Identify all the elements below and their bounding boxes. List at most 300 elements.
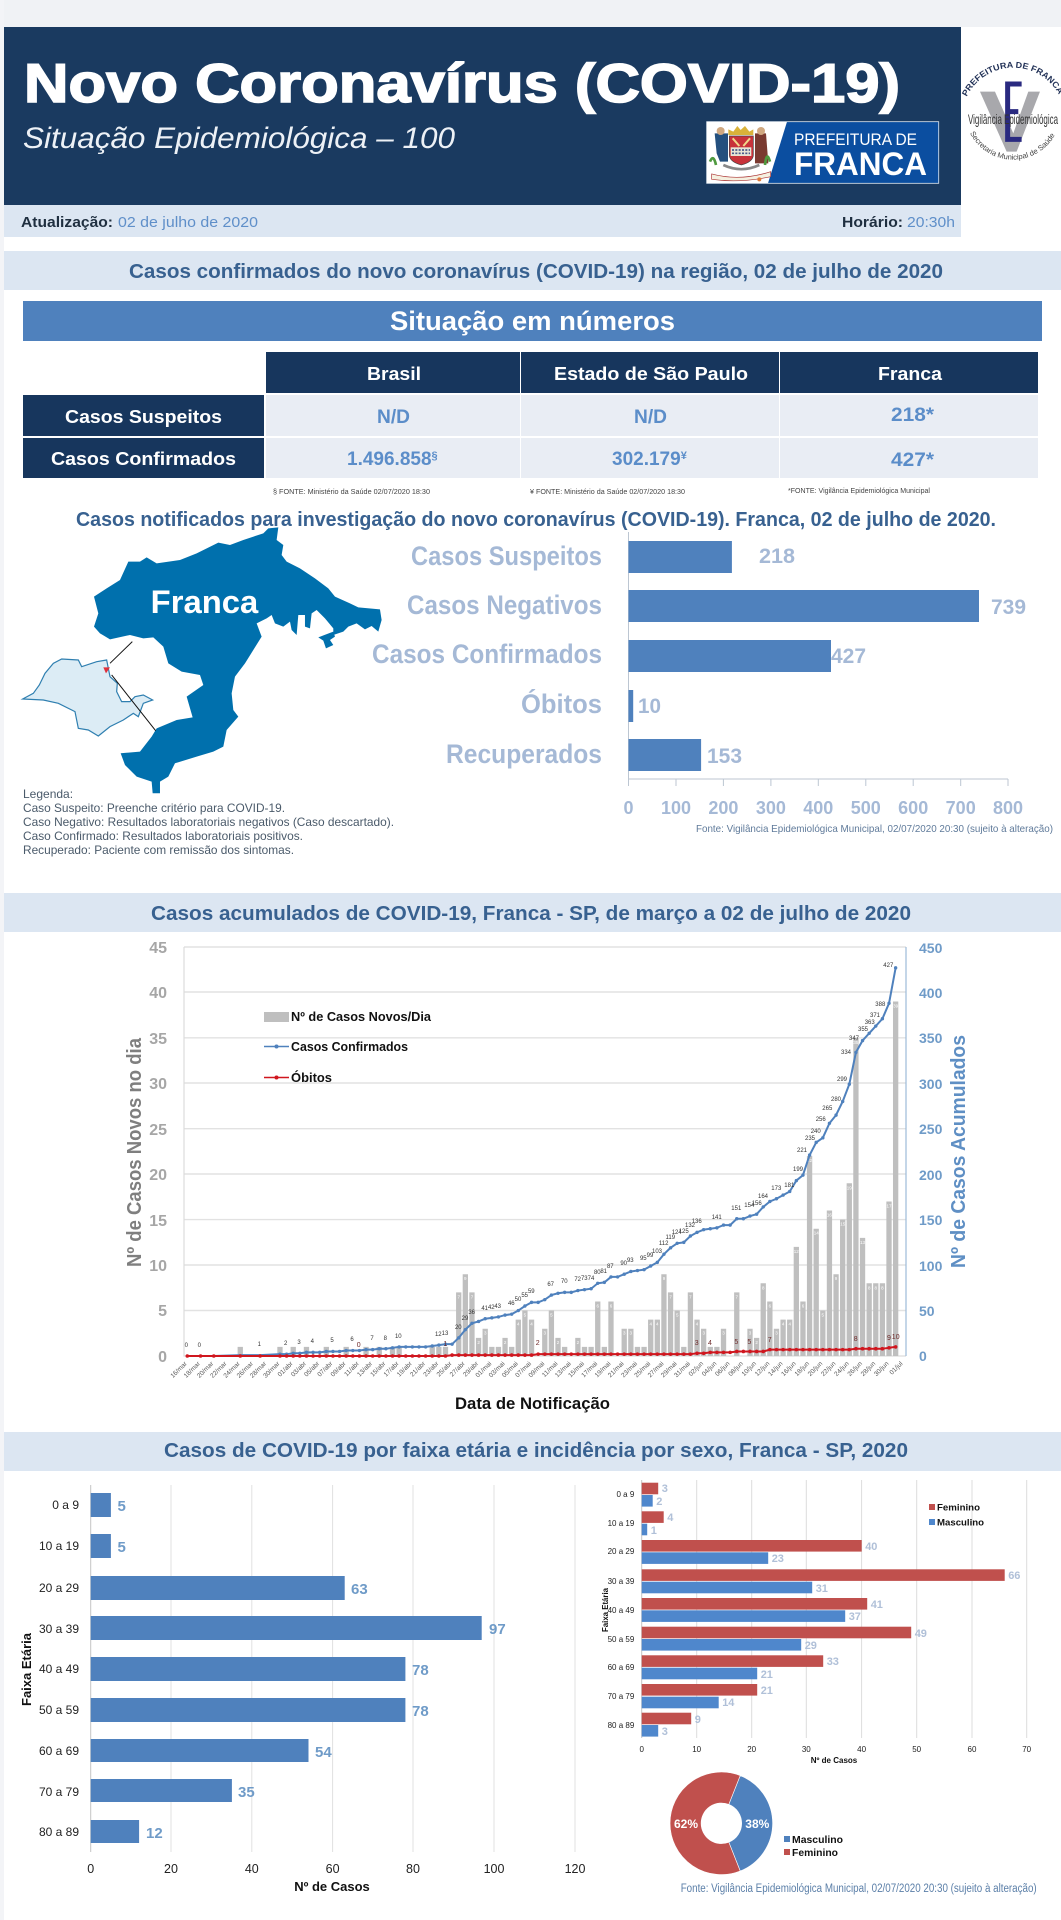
x axis dates: 01/abr xyxy=(277,1360,295,1378)
table: situação em números: ¥ xyxy=(681,450,688,462)
bar value labels: 3 xyxy=(623,1331,626,1336)
bar value labels: 5 xyxy=(524,1312,527,1318)
bar chart: casos por faixa etária: 70 a 79 xyxy=(39,1785,79,1799)
bar value labels: 8 xyxy=(881,1285,884,1290)
bar value labels: 22 xyxy=(807,1158,813,1163)
bar chart: casos por sexo e faixa etária xyxy=(601,1480,1032,1765)
bar chart: casos por sexo e faixa etária: 50 xyxy=(912,1745,922,1754)
bar chart: casos por sexo e faixa etária: 40 a 49 xyxy=(608,1606,635,1615)
x axis dates: 19/abr xyxy=(396,1360,414,1378)
x axis title: Data de Notificação xyxy=(455,1394,610,1413)
bar chart: casos por sexo e faixa etária: 2 xyxy=(656,1496,662,1508)
bar chart: casos por faixa etária: 54 xyxy=(315,1744,332,1761)
x axis dates: 30/jun xyxy=(873,1360,891,1378)
bar value labels: 3 xyxy=(722,1331,725,1336)
x axis dates: 03/mai xyxy=(488,1360,507,1379)
data labels: casos confirmados: 80 xyxy=(594,1270,601,1276)
x axis dates: 19/mai xyxy=(594,1360,612,1379)
table: situação em números: 1.496.858 xyxy=(347,449,432,470)
x axis dates: 14/jun xyxy=(767,1360,785,1378)
bar chart: casos por sexo e faixa etária: 10 xyxy=(692,1745,702,1754)
data labels: casos confirmados: 81 xyxy=(600,1269,608,1275)
data labels: casos confirmados: 12 xyxy=(435,1332,442,1338)
bar chart: casos notificados: 400 xyxy=(803,798,833,818)
bar chart: casos por faixa etária: 100 xyxy=(484,1862,504,1876)
chart legend xyxy=(264,1009,432,1085)
bar value labels: 7 xyxy=(689,1294,692,1299)
bar chart: casos por sexo e faixa etária: 33 xyxy=(827,1656,839,1668)
footnotes: *FONTE: Vigilância Epidemiológica Municipal xyxy=(788,488,930,495)
bar chart: casos notificados: 0 xyxy=(623,798,634,818)
donut chart: distribuição por sexo xyxy=(670,1772,843,1875)
data labels: casos confirmados: 1 xyxy=(258,1342,262,1348)
x axis dates: 08/jun xyxy=(727,1360,745,1378)
x axis dates: 26/mar xyxy=(236,1360,256,1380)
subtitle: Situação Epidemiológica – 100 xyxy=(23,122,455,155)
right axis title: Nº de Casos Acumulados xyxy=(948,1035,970,1268)
legend: sexo: Feminino xyxy=(937,1502,980,1514)
x axis dates: 09/mai xyxy=(527,1360,546,1379)
data labels: casos confirmados: 95 xyxy=(640,1256,647,1262)
data labels: casos confirmados: 6 xyxy=(350,1337,354,1343)
data labels: casos confirmados: 363 xyxy=(865,1020,875,1026)
x axis dates: 16/mar xyxy=(169,1360,189,1380)
map legend text: Recuperado: Paciente com remissão dos sintomas. xyxy=(23,843,294,857)
bar value labels: 6 xyxy=(596,1304,599,1308)
bar value labels: 7 xyxy=(457,1294,460,1299)
section heading: faixa etária e sexo xyxy=(4,1432,1061,1471)
bar value labels: 9 xyxy=(464,1276,467,1281)
legend: sexo xyxy=(929,1502,984,1528)
bar chart: casos notificados: Casos Suspeitos xyxy=(411,541,602,571)
data labels: casos confirmados: 280 xyxy=(831,1097,842,1103)
bar value labels: 5 xyxy=(822,1312,825,1318)
table: situação em números xyxy=(23,352,1038,496)
bar chart: casos por sexo e faixa etária: 23 xyxy=(772,1553,784,1565)
data labels: casos confirmados: 156 xyxy=(752,1201,762,1207)
left axis title: Nº de Casos Novos no dia xyxy=(124,1037,146,1267)
bar chart: casos por sexo e faixa etária: 3 xyxy=(662,1726,668,1738)
bar value labels: 19 xyxy=(847,1185,852,1190)
right axis numbers xyxy=(919,940,943,1364)
x axis dates: 17/abr xyxy=(383,1360,401,1378)
left axis numbers: 15 xyxy=(149,1213,167,1230)
data labels: casos confirmados: 74 xyxy=(588,1276,595,1282)
data labels: casos confirmados: 141 xyxy=(712,1215,722,1221)
right axis numbers: 250 xyxy=(919,1121,943,1137)
table: situação em números: N/D xyxy=(377,407,410,428)
logo: Vigilância Epidemiológica: Secretaria Municipal de Saúde xyxy=(970,132,1054,161)
data labels: casos confirmados: 240 xyxy=(811,1129,821,1135)
bar chart: casos por faixa etária xyxy=(19,1485,585,1894)
bar chart: casos por sexo e faixa etária: 60 xyxy=(968,1745,977,1754)
x axis dates: 26/jun xyxy=(846,1360,864,1378)
x axis dates: 27/abr xyxy=(449,1360,467,1378)
table: situação em números: 427* xyxy=(891,450,935,471)
table: situação em números: Estado de São Paulo xyxy=(554,364,748,384)
bar chart: casos notificados xyxy=(372,532,1053,835)
chart legend: Nº de Casos Novos/Dia xyxy=(291,1009,432,1024)
x axis dates: 27/mai xyxy=(647,1360,665,1379)
bar chart: casos por faixa etária: 120 xyxy=(565,1862,585,1876)
x axis dates: 10/jun xyxy=(741,1360,758,1378)
x axis dates: 22/mar xyxy=(209,1360,229,1380)
data labels: casos confirmados: 132 xyxy=(685,1223,696,1229)
bar chart: casos por sexo e faixa etária: 9 xyxy=(695,1714,701,1726)
data labels: casos confirmados: 0 xyxy=(198,1343,202,1349)
data labels: casos confirmados: 29 xyxy=(462,1316,469,1322)
x axis dates: 09/abr xyxy=(330,1360,348,1378)
bar value labels: 39 xyxy=(893,1004,899,1008)
bar value labels: 8 xyxy=(868,1285,871,1290)
bar value labels: 7 xyxy=(471,1294,474,1299)
bar chart: casos por faixa etária: 0 xyxy=(87,1862,94,1876)
bar chart: casos notificados: 10 xyxy=(638,695,661,718)
bar value labels: 9 xyxy=(663,1276,666,1281)
data labels: casos confirmados: 265 xyxy=(822,1106,833,1112)
bar value labels: 3 xyxy=(630,1331,633,1336)
donut legend: Feminino xyxy=(792,1847,838,1859)
title: Novo Coronavírus (COVID-19) xyxy=(24,52,900,114)
bar value labels: 8 xyxy=(875,1285,878,1290)
table: situação em números: Brasil xyxy=(367,364,421,384)
bar chart: casos por sexo e faixa etária: 41 xyxy=(871,1599,883,1611)
map legend text: Caso Negativo: Resultados laboratoriais negativos (Caso descartado). xyxy=(23,815,394,829)
right axis numbers: 300 xyxy=(919,1076,943,1092)
x axis dates: 15/abr xyxy=(369,1360,388,1378)
bar chart: casos notificados: 500 xyxy=(851,798,881,818)
left axis numbers: 35 xyxy=(149,1031,167,1048)
bar value labels: 2 xyxy=(504,1340,507,1345)
y axis title: Faixa Etária xyxy=(601,1587,610,1632)
bar chart: casos por faixa etária: 80 xyxy=(406,1862,420,1876)
data labels: casos confirmados: 67 xyxy=(547,1282,555,1288)
bar chart: casos notificados: 300 xyxy=(756,798,786,818)
chart legend: Casos Confirmados xyxy=(291,1039,408,1054)
update bar: 02 de julho de 2020 xyxy=(118,214,258,231)
donut chart: distribuição por sexo: 62% xyxy=(674,1817,698,1831)
data labels: casos confirmados: 8 xyxy=(384,1336,388,1342)
bar chart: casos notificados: Casos Confirmados xyxy=(372,639,602,669)
bar chart: casos por sexo e faixa etária: 30 a 39 xyxy=(608,1577,635,1586)
bar value labels: 35 xyxy=(853,1040,859,1045)
x axis dates xyxy=(169,1360,905,1380)
bar value labels: 4 xyxy=(649,1322,652,1327)
bar value labels: 14 xyxy=(814,1231,819,1236)
data labels: casos confirmados: 20 xyxy=(455,1325,462,1331)
bar chart: casos por faixa etária: 80 a 89 xyxy=(39,1825,79,1839)
data labels: óbitos: 1 xyxy=(443,1341,447,1348)
x axis dates: 28/jun xyxy=(860,1360,877,1378)
section heading: faixa etária e sexo: Casos de COVID-19 por faixa etária e incidência por sexo, Franca - SP, 2020 xyxy=(164,1440,908,1462)
bar value labels: 8 xyxy=(762,1285,765,1290)
data labels: casos confirmados: 70 xyxy=(561,1279,568,1285)
logo text: prefeitura de: PREFEITURA DE xyxy=(794,130,917,149)
data labels: casos confirmados: 427 xyxy=(883,963,894,969)
right axis numbers: 350 xyxy=(919,1030,943,1046)
bar chart: casos por faixa etária: 78 xyxy=(412,1703,429,1720)
bar chart: casos notificados: Recuperados xyxy=(446,739,602,769)
bar value labels: 15 xyxy=(840,1222,846,1227)
right axis numbers: 0 xyxy=(919,1348,927,1364)
x axis dates: 01/jul xyxy=(888,1360,905,1376)
bar chart: casos notificados: 153 xyxy=(707,745,742,768)
bar value labels: 4 xyxy=(782,1322,785,1327)
data labels: óbitos: 3 xyxy=(695,1340,699,1347)
data labels: casos confirmados: 7 xyxy=(370,1336,374,1342)
data labels: óbitos: 9 xyxy=(887,1335,891,1342)
data labels: casos confirmados: 55 xyxy=(521,1293,529,1299)
bar value labels: 5 xyxy=(550,1312,553,1318)
bar chart: casos por sexo e faixa etária: 31 xyxy=(816,1583,828,1595)
x axis dates: 11/abr xyxy=(343,1360,361,1378)
y axis title: Faixa Etária xyxy=(19,1632,34,1706)
map legend text: Legenda: xyxy=(23,787,73,801)
bar chart: casos notificados: 700 xyxy=(946,798,976,818)
bar value labels: 6 xyxy=(610,1304,613,1308)
left axis numbers: 45 xyxy=(149,940,167,957)
right axis numbers: 450 xyxy=(919,940,943,956)
x axis dates: 17/mai xyxy=(580,1360,599,1379)
bar chart: casos por faixa etária: 35 xyxy=(238,1784,255,1801)
update bar: Atualização: xyxy=(21,214,113,231)
bar value labels: 3 xyxy=(544,1331,547,1336)
data labels: casos confirmados: 0 xyxy=(185,1343,189,1349)
x axis dates: 11/mai xyxy=(541,1360,559,1379)
data labels: casos confirmados: 50 xyxy=(515,1297,522,1303)
bar value labels: 6 xyxy=(802,1304,805,1308)
x axis title: Nº de Casos xyxy=(294,1879,370,1894)
bar value labels: 12 xyxy=(794,1249,799,1254)
bar chart: casos por sexo e faixa etária: 0 a 9 xyxy=(617,1490,635,1499)
logo: Vigilância Epidemiológica xyxy=(962,62,1061,161)
bar value labels: 4 xyxy=(696,1322,699,1327)
x axis dates: 04/jun xyxy=(701,1360,719,1378)
update bar xyxy=(4,205,961,237)
bar chart: casos por faixa etária: 40 xyxy=(245,1862,259,1876)
donut chart: distribuição por sexo: 38% xyxy=(745,1817,770,1831)
bar value labels: 2 xyxy=(577,1340,580,1345)
map legend text xyxy=(23,787,394,857)
bars: novos casos por dia xyxy=(238,1001,898,1356)
data labels: casos confirmados: 99 xyxy=(647,1253,654,1259)
x axis dates: 25/abr xyxy=(436,1360,454,1378)
bar chart: casos por sexo e faixa etária: 70 a 79 xyxy=(608,1692,635,1701)
footnotes: § FONTE: Ministério da Saúde 02/07/2020 18:30 xyxy=(273,489,430,496)
bar value labels xyxy=(457,1004,899,1345)
banner: situação em números xyxy=(23,301,1042,341)
x axis dates: 18/jun xyxy=(794,1360,811,1378)
data labels: óbitos xyxy=(357,1334,900,1349)
update bar: 20:30h xyxy=(907,214,955,231)
data labels: casos confirmados: 388 xyxy=(875,1002,886,1008)
bar value labels: 4 xyxy=(656,1322,659,1327)
bar value labels: 3 xyxy=(702,1331,705,1336)
legend: sexo: Masculino xyxy=(937,1518,984,1528)
section heading: casos acumulados xyxy=(4,893,1061,932)
bar chart: casos por sexo e faixa etária: 29 xyxy=(805,1640,817,1652)
x axis dates: 24/jun xyxy=(833,1360,851,1378)
bar value labels: 2 xyxy=(755,1340,758,1345)
x axis dates: 21/abr xyxy=(409,1360,428,1378)
left axis numbers: 25 xyxy=(149,1122,167,1139)
table: situação em números: Casos Confirmados xyxy=(51,449,236,469)
logo text: franca: FRANCA xyxy=(794,146,927,182)
bar chart: casos por sexo e faixa etária: 49 xyxy=(915,1628,927,1640)
data labels: casos confirmados: 181 xyxy=(784,1183,795,1189)
bar chart: casos notificados: Casos Negativos xyxy=(407,590,602,620)
data labels: óbitos: 8 xyxy=(854,1336,858,1343)
bar chart: casos por sexo e faixa etária: 14 xyxy=(722,1697,735,1709)
left axis numbers: 5 xyxy=(158,1303,167,1320)
footnotes xyxy=(273,488,930,496)
data labels: óbitos: 4 xyxy=(708,1340,712,1347)
x axis dates: 07/abr xyxy=(316,1360,335,1378)
table: situação em números: N/D xyxy=(634,407,667,428)
bar chart: casos por faixa etária: 30 a 39 xyxy=(39,1622,79,1636)
x axis dates: 15/mai xyxy=(567,1360,586,1379)
data labels: casos confirmados: 3 xyxy=(297,1340,301,1346)
logo: Prefeitura de Franca xyxy=(707,122,939,183)
heading: casos notificados: Casos notificados para investigação do novo coronavírus (COVID-19). Franca, 02 de julho de 2020. xyxy=(76,509,996,531)
data labels: casos confirmados: 59 xyxy=(528,1289,535,1295)
line: óbitos xyxy=(187,1347,896,1356)
x axis dates: 07/mai xyxy=(514,1360,533,1379)
data labels: casos confirmados: 46 xyxy=(508,1301,515,1307)
x axis dates: 25/mai xyxy=(633,1360,652,1379)
x axis dates: 12/jun xyxy=(754,1360,772,1378)
bar chart: casos por sexo e faixa etária: 37 xyxy=(849,1611,861,1623)
data labels: casos confirmados: 90 xyxy=(620,1261,628,1267)
x axis dates: 05/mai xyxy=(501,1360,520,1379)
bar value labels: 7 xyxy=(669,1294,672,1299)
bar chart: casos por sexo e faixa etária: 20 xyxy=(747,1745,757,1754)
bar value labels: 3 xyxy=(484,1331,487,1336)
bar chart: casos por sexo e faixa etária: 60 a 69 xyxy=(608,1663,635,1672)
left axis numbers xyxy=(149,940,167,1366)
bar chart: casos por sexo e faixa etária: 50 a 59 xyxy=(608,1635,635,1644)
bar chart: casos por sexo e faixa etária: 4 xyxy=(667,1512,674,1524)
bar value labels: 4 xyxy=(517,1322,520,1327)
bar chart: casos por sexo e faixa etária: 66 xyxy=(1008,1570,1020,1582)
x axis dates: 28/mar xyxy=(249,1360,269,1380)
data labels: casos confirmados: 151 xyxy=(731,1206,742,1212)
data labels: casos confirmados: 199 xyxy=(793,1167,804,1173)
data labels: casos confirmados: 42 xyxy=(488,1305,495,1311)
x axis dates: 16/jun xyxy=(780,1360,798,1378)
bar chart: casos por faixa etária: 97 xyxy=(489,1621,506,1638)
left axis numbers: 20 xyxy=(149,1167,167,1184)
data labels: casos confirmados: 73 xyxy=(581,1276,588,1282)
x axis dates: 05/abr xyxy=(303,1360,322,1378)
bar chart: casos por sexo e faixa etária: 21 xyxy=(761,1685,773,1697)
data labels: casos confirmados: 235 xyxy=(805,1136,816,1142)
data labels: casos confirmados: 41 xyxy=(481,1306,489,1312)
bar chart: casos por faixa etária: 20 xyxy=(164,1862,178,1876)
data labels: casos confirmados: 5 xyxy=(330,1338,334,1344)
data labels: óbitos: 0 xyxy=(357,1342,361,1349)
bar chart: casos por faixa etária: 5 xyxy=(118,1498,126,1515)
right axis numbers: 200 xyxy=(919,1167,943,1183)
bar chart: casos por faixa etária: 60 xyxy=(326,1862,340,1876)
bar chart: casos por faixa etária: 78 xyxy=(412,1662,429,1679)
bar chart: casos notificados: 100 xyxy=(661,798,691,818)
data labels: casos confirmados: 221 xyxy=(797,1148,808,1154)
bar chart: casos por sexo e faixa etária: 10 a 19 xyxy=(608,1519,635,1528)
bar chart: casos notificados: 427 xyxy=(831,645,866,668)
left axis numbers: 30 xyxy=(149,1076,167,1093)
bar value labels: 6 xyxy=(769,1304,772,1308)
donut legend: Masculino xyxy=(792,1834,843,1846)
x axis dates: 13/abr xyxy=(356,1360,375,1378)
data labels: casos confirmados: 119 xyxy=(666,1235,676,1241)
donut legend xyxy=(784,1834,843,1859)
right axis numbers: 150 xyxy=(919,1212,943,1228)
bar chart: casos por sexo e faixa etária: 40 xyxy=(865,1541,877,1553)
x axis dates: 24/mar xyxy=(222,1360,242,1380)
table: situação em números: 218* xyxy=(891,405,935,426)
section heading: casos acumulados: Casos acumulados de COVID-19, Franca - SP, de março a 02 de julho de 2020 xyxy=(151,903,911,925)
chart legend: Óbitos xyxy=(291,1070,332,1085)
bar value labels: 3 xyxy=(775,1331,778,1336)
x axis dates: 02/jun xyxy=(688,1360,705,1378)
right axis numbers: 50 xyxy=(919,1303,935,1319)
map legend text: Caso Suspeito: Preenche critério para COVID-19. xyxy=(23,801,285,815)
data labels: casos confirmados: 164 xyxy=(758,1194,769,1200)
x axis dates: 23/abr xyxy=(422,1360,441,1378)
x axis title: Nº de Casos xyxy=(811,1756,858,1765)
x axis dates: 21/mai xyxy=(607,1360,626,1379)
footnotes: ¥ FONTE: Ministério da Saúde 02/07/2020 18:30 xyxy=(530,489,685,496)
left axis numbers: 0 xyxy=(158,1349,167,1366)
bar chart: casos por sexo e faixa etária: 30 xyxy=(802,1745,811,1754)
left axis numbers: 40 xyxy=(149,985,167,1002)
combo chart: casos novos e acumulados xyxy=(124,940,970,1413)
x axis dates: 23/mai xyxy=(620,1360,639,1379)
left axis numbers: 10 xyxy=(149,1258,167,1275)
data labels: casos confirmados: 112 xyxy=(659,1241,669,1247)
table: situação em números: Franca xyxy=(878,364,943,384)
bar chart: casos por faixa etária: 63 xyxy=(351,1581,368,1598)
bar chart: casos notificados: 200 xyxy=(708,798,738,818)
bar chart: casos por faixa etária: 10 a 19 xyxy=(39,1539,79,1553)
bar chart: casos por sexo e faixa etária: 80 a 89 xyxy=(608,1721,635,1730)
x axis dates: 31/mai xyxy=(673,1360,692,1379)
header panel xyxy=(4,27,961,205)
bar value labels: 4 xyxy=(788,1322,791,1327)
bar chart: casos por faixa etária: 40 a 49 xyxy=(39,1662,79,1676)
data labels: casos confirmados: 2 xyxy=(284,1341,288,1347)
map legend text: Caso Confirmado: Resultados laboratoriais positivos. xyxy=(23,829,303,843)
bar chart: casos por sexo e faixa etária: 1 xyxy=(651,1525,657,1537)
x axis dates: 13/mai xyxy=(554,1360,573,1379)
bar chart: casos por sexo e faixa etária: 3 xyxy=(662,1483,668,1495)
bar chart: casos por sexo e faixa etária: 70 xyxy=(1022,1745,1032,1754)
bar value labels: 7 xyxy=(736,1294,739,1299)
bar value labels: 2 xyxy=(557,1340,560,1345)
data labels: casos confirmados: 72 xyxy=(574,1277,582,1283)
right axis numbers: 400 xyxy=(919,985,943,1001)
bar chart: casos por sexo e faixa etária: 21 xyxy=(761,1669,773,1681)
table: situação em números: 302.179 xyxy=(612,449,681,470)
bar chart: casos por sexo e faixa etária: 20 a 29 xyxy=(608,1547,635,1556)
data labels: casos confirmados: 136 xyxy=(692,1219,702,1225)
bar chart: casos notificados: Óbitos xyxy=(521,688,602,719)
bar chart: casos por faixa etária: 12 xyxy=(146,1825,163,1842)
data labels: óbitos: 5 xyxy=(747,1339,751,1346)
bar chart: casos por faixa etária: 5 xyxy=(118,1539,126,1556)
data labels: casos confirmados: 36 xyxy=(468,1310,476,1316)
